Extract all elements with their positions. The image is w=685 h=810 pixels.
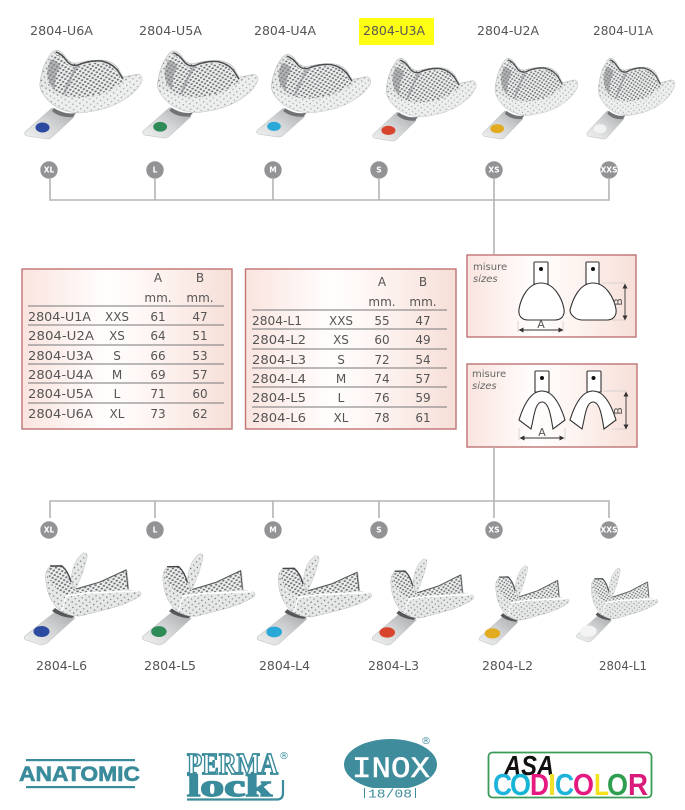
- lower tray labels: 2804-L5: [144, 659, 196, 673]
- lower tray labels: 2804-L4: [259, 659, 310, 673]
- panel: upper sizes table: L: [114, 387, 121, 401]
- panel: lower sizes table: 54: [415, 353, 431, 367]
- upper size badges: XS: [488, 166, 500, 175]
- panel: lower sizes table: XL: [334, 411, 349, 425]
- panel: upper tray measurement diagram: B: [612, 298, 625, 306]
- panel: lower sizes table: B: [419, 275, 427, 289]
- lower tray L6 blue: [24, 553, 141, 645]
- logo: ASA Codicolor: ASA: [503, 750, 554, 781]
- lower tray labels: [36, 659, 647, 673]
- panel: lower sizes table: 74: [374, 372, 390, 386]
- panel: lower sizes table: 2804-L1: [252, 314, 302, 328]
- panel: lower sizes table: 59: [415, 391, 431, 405]
- panel: lower sizes table: 47: [415, 314, 431, 328]
- panel: lower sizes table: A: [378, 275, 387, 289]
- logo: Permalock: ®: [279, 751, 289, 762]
- upper size badges: L: [153, 166, 158, 175]
- panel: lower sizes table: M: [336, 372, 346, 386]
- panel: lower sizes table: 2804-L4: [252, 372, 306, 386]
- panel: lower sizes table: [246, 269, 456, 429]
- upper tray U3A red: [373, 58, 476, 141]
- panel: upper sizes table: 71: [150, 387, 166, 401]
- panel: upper tray measurement diagram: [467, 255, 636, 337]
- lower size badges: XS: [488, 526, 500, 535]
- panel: lower sizes table: 2804-L3: [252, 353, 306, 367]
- panel: upper sizes table: mm.: [186, 291, 214, 305]
- panel: upper sizes table: 64: [150, 329, 166, 343]
- panel: upper tray measurement diagram: sizes: [473, 274, 498, 285]
- logo: ASA Codicolor: C: [555, 767, 574, 802]
- panel: lower sizes table: S: [337, 353, 345, 367]
- panel: lower sizes table: 60: [374, 333, 390, 347]
- upper size badges: [40, 161, 618, 179]
- logo: ASA Codicolor: C: [493, 767, 512, 802]
- panel: lower tray measurement diagram: B: [612, 407, 625, 415]
- panel: lower sizes table: 49: [415, 333, 431, 347]
- logo: Permalock: lock: [187, 768, 273, 803]
- upper size badges: XL: [44, 166, 55, 175]
- logo: ASA Codicolor: D: [530, 767, 549, 802]
- logo: Permalock: PERMA: [187, 746, 278, 781]
- panel: upper sizes table: XS: [109, 329, 125, 343]
- panel: upper sizes table: [22, 269, 232, 429]
- lower tray L1 white: [576, 568, 658, 642]
- panel: lower sizes table: mm.: [409, 295, 437, 309]
- panel: lower sizes table: 76: [374, 391, 390, 405]
- panel: lower sizes table: 78: [374, 411, 390, 425]
- panel: lower sizes table: XXS: [329, 314, 353, 328]
- logo: Inox 18/08: INOX: [352, 753, 430, 787]
- panel: lower sizes table: 57: [415, 372, 431, 386]
- lower size badges: XL: [44, 526, 55, 535]
- lower size badges: [40, 521, 618, 539]
- upper tray U6A blue: [25, 50, 142, 139]
- logo: Inox 18/08: ®: [421, 736, 431, 747]
- panel: lower tray measurement diagram: A: [538, 426, 546, 439]
- upper size badges: XXS: [601, 166, 617, 175]
- upper tray U5A green: [143, 51, 258, 138]
- panel: lower sizes table: 61: [415, 411, 431, 425]
- panel: lower sizes table: XS: [333, 333, 349, 347]
- panel: lower sizes table: 72: [374, 353, 390, 367]
- panel: upper sizes table: 2804-U1A: [28, 310, 92, 324]
- upper tray labels: 2804-U5A: [139, 24, 203, 38]
- lower tray L4 cyan: [257, 556, 372, 645]
- logo: ASA Codicolor: I: [548, 767, 556, 802]
- panel: lower sizes table: 55: [374, 314, 390, 328]
- lower tray labels: 2804-L1: [599, 659, 647, 673]
- panel: upper sizes table: S: [113, 349, 121, 363]
- upper tray labels: 2804-U1A: [593, 24, 654, 38]
- panel: upper sizes table: B: [196, 271, 204, 285]
- lower tray labels: 2804-L3: [368, 659, 419, 673]
- panel: upper sizes table: A: [154, 271, 163, 285]
- upper tray labels: 2804-U3A: [363, 24, 426, 38]
- lower tray L5 green: [142, 554, 255, 645]
- lower size connector lines: [50, 447, 609, 518]
- panel: upper sizes table: 69: [150, 368, 166, 382]
- panel: upper sizes table: mm.: [144, 291, 172, 305]
- lower size badges: XXS: [601, 526, 617, 535]
- panel: upper sizes table: 61: [150, 310, 166, 324]
- logo: ASA Codicolor: O: [510, 767, 531, 802]
- lower size badges: M: [269, 526, 277, 535]
- panel: upper sizes table: 2804-U4A: [28, 368, 94, 382]
- panel: upper sizes table: XXS: [105, 310, 129, 324]
- panel: upper sizes table: M: [112, 368, 122, 382]
- panel: upper sizes table: 2804-U5A: [28, 387, 94, 401]
- panel: upper sizes table: 60: [192, 387, 208, 401]
- panel: upper sizes table: 2804-U3A: [28, 349, 94, 363]
- lower tray labels: 2804-L2: [482, 659, 533, 673]
- panel: upper sizes table: 73: [150, 407, 166, 421]
- lower tray L3 red: [372, 559, 474, 645]
- panel: upper sizes table: 66: [150, 349, 166, 363]
- panel: lower tray measurement diagram: sizes: [472, 381, 497, 392]
- panel: lower sizes table: 2804-L5: [252, 391, 306, 405]
- panel: upper sizes table: 62: [192, 407, 208, 421]
- logo: ASA Codicolor: L: [594, 767, 609, 802]
- logo: ASA Codicolor: [488, 750, 652, 802]
- upper tray labels: 2804-U4A: [254, 24, 317, 38]
- panel: upper sizes table: 51: [192, 329, 208, 343]
- panel: lower sizes table: mm.: [368, 295, 396, 309]
- panel: upper tray measurement diagram: misure: [473, 262, 507, 273]
- lower tray L2 yellow: [479, 566, 569, 645]
- logo: ASA Codicolor: O: [573, 767, 594, 802]
- logo: Anatomic: ANATOMIC: [19, 763, 140, 786]
- lower size badges: L: [153, 526, 158, 535]
- upper tray labels: 2804-U6A: [30, 24, 94, 38]
- panel: upper sizes table: 2804-U6A: [28, 407, 94, 421]
- panel: lower sizes table: L: [338, 391, 345, 405]
- upper tray labels: [30, 24, 654, 38]
- upper tray labels: 2804-U2A: [477, 24, 540, 38]
- panel: upper tray measurement diagram: A: [537, 318, 545, 331]
- logo: ASA Codicolor: R: [628, 767, 648, 802]
- upper tray U2A yellow: [483, 58, 578, 139]
- upper size badges: S: [376, 166, 382, 175]
- logo: Inox 18/08: 18/08: [368, 788, 412, 802]
- panel: upper sizes table: XL: [110, 407, 125, 421]
- panel: upper sizes table: 53: [192, 349, 208, 363]
- logo: Inox 18/08: [344, 736, 437, 802]
- panel: upper sizes table: 2804-U2A: [28, 329, 95, 343]
- panel: lower tray measurement diagram: [467, 364, 637, 447]
- panel: lower sizes table: 2804-L2: [252, 333, 306, 347]
- panel: upper sizes table: 57: [192, 368, 208, 382]
- logo: Permalock: [187, 746, 289, 803]
- upper size connector lines: [50, 179, 609, 254]
- panel: lower sizes table: 2804-L6: [252, 411, 306, 425]
- logo: ASA Codicolor: O: [607, 767, 628, 802]
- upper tray U1A white: [587, 58, 675, 139]
- panel: lower tray measurement diagram: misure: [472, 369, 506, 380]
- upper size badges: M: [269, 166, 277, 175]
- lower size badges: S: [376, 526, 382, 535]
- highlight: 2804-U3A: [359, 18, 434, 45]
- lower tray labels: 2804-L6: [36, 659, 87, 673]
- upper tray U4A cyan: [257, 54, 371, 137]
- panel: upper sizes table: 47: [192, 310, 208, 324]
